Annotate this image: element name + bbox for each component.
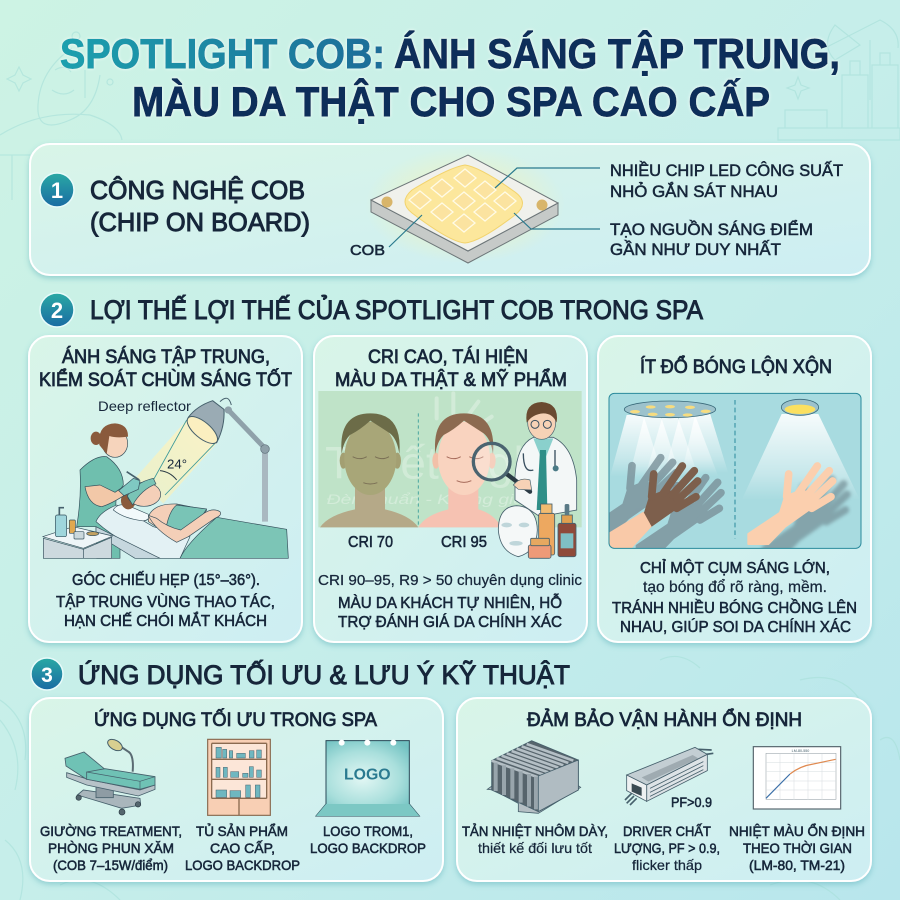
illustration: treatment under lamp (43, 398, 288, 558)
illustration: skin comparison: Tuyết Lights (325, 437, 575, 488)
captions: operation: THEO THỜI GIAN (743, 840, 852, 856)
panel: fewer shadows (592, 336, 871, 642)
icon: cob chip (365, 147, 600, 263)
captions: operation: thiết kế đối lưu tốt (478, 840, 592, 856)
panel: spa applications (30, 698, 443, 881)
captions: applications: LOGO BACKDROP (310, 840, 426, 856)
badge 1 (40, 173, 74, 207)
panel heading: ÁNH SÁNG TẬP TRUNG, (62, 346, 270, 368)
panel caption: CHỈ MỘT CỤM SÁNG LỚN, (640, 558, 830, 577)
captions: applications: LOGO BACKDROP (185, 857, 300, 873)
cob callouts: NHỎ GẮN SÁT NHAU (610, 182, 778, 201)
label: deep reflector: Deep reflector (98, 398, 191, 414)
panel: focused light (29, 336, 302, 642)
icon: heatsink (487, 741, 581, 813)
chart: lm-80 colour stability: LM-80-550 (792, 749, 809, 753)
illustration: shadow comparison (608, 392, 862, 549)
title: MÀU DA THẬT CHO SPA CAO CẤP (132, 77, 770, 125)
cob callouts: COB (350, 242, 385, 259)
icon: treatment bed (65, 737, 155, 815)
captions: operation: (LM-80, TM-21) (749, 857, 845, 873)
panel: cob technology (30, 144, 870, 275)
section 3 heading: 3 (41, 664, 53, 687)
panel caption: tạo bóng đổ rõ ràng, mềm. (643, 578, 827, 596)
cri labels (348, 534, 487, 551)
captions: applications: TỦ SẢN PHẨM (196, 822, 288, 839)
captions: applications: CAO CẤP, (210, 840, 275, 856)
title: SPOTLIGHT COB: (60, 30, 385, 77)
panel heading: CRI CAO, TÁI HIỆN (368, 346, 528, 368)
panel heading: ĐẢM BẢO VẬN HÀNH ỔN ĐỊNH (527, 709, 802, 731)
captions: applications (40, 822, 426, 873)
panel: stable operation (457, 698, 871, 881)
badge 1: 1 (51, 178, 63, 203)
panel caption: TRỢ ĐÁNH GIÁ DA CHÍNH XÁC (338, 612, 562, 631)
label: power factor: PF>0.9 (671, 794, 712, 810)
section 2 heading: LỢI THẾ LỢI THẾ CỦA SPOTLIGHT COB TRONG SPA (90, 293, 703, 325)
icon: logo backdrop (316, 740, 419, 816)
title: ÁNH SÁNG TẬP TRUNG, (394, 29, 840, 77)
cob callouts (350, 161, 843, 259)
captions: operation: NHIỆT MÀU ỔN ĐỊNH (729, 822, 865, 839)
panel caption: GÓC CHIẾU HẸP (15°–36°). (72, 570, 260, 589)
panel heading (335, 346, 567, 391)
cob callouts: NHIỀU CHIP LED CÔNG SUẤT (610, 161, 843, 180)
section 2 heading: 2 (51, 298, 63, 323)
captions: applications: GIƯỜNG TREATMENT, (40, 823, 182, 839)
cob heading (90, 175, 310, 237)
captions: applications: LOGO TROM1, (323, 823, 413, 839)
section 3 heading: ỨNG DỤNG TỐI ƯU & LƯU Ý KỸ THUẬT (78, 658, 570, 690)
cri labels: CRI 95 (441, 534, 487, 551)
cob callouts: GẦN NHƯ DUY NHẤT (610, 240, 781, 259)
panel heading (39, 346, 292, 391)
illustration: skin comparison (318, 391, 582, 558)
illustration: treatment under lamp: 24° (167, 458, 187, 472)
chart: lm-80 colour stability (753, 747, 841, 809)
panel heading: ỨNG DỤNG TỐI ƯU TRONG SPA (94, 709, 377, 731)
panel caption (612, 558, 857, 636)
captions: applications: (COB 7–15W/điểm) (53, 857, 168, 873)
title (60, 29, 840, 125)
panel caption (318, 572, 582, 631)
panel heading: MÀU DA THẬT & MỸ PHẨM (335, 369, 567, 391)
icon: driver (625, 747, 713, 805)
captions: operation (462, 822, 865, 873)
panel caption: TẬP TRUNG VÙNG THAO TÁC, (56, 592, 275, 611)
cob heading: CÔNG NGHỆ COB (90, 175, 305, 205)
panel caption: NHAU, GIÚP SOI DA CHÍNH XÁC (620, 617, 851, 636)
cob callouts: TẠO NGUỒN SÁNG ĐIỂM (610, 220, 813, 239)
icon: logo backdrop: LOGO (344, 766, 391, 783)
illustration: skin comparison: Đèn chuẩn - Không gian chất (327, 491, 578, 507)
captions: operation: flicker thấp (632, 857, 702, 873)
captions: applications: PHÒNG PHUN XĂM (48, 840, 174, 856)
cri labels: CRI 70 (348, 534, 393, 551)
captions: operation: DRIVER CHẤT (623, 823, 711, 839)
captions: operation: LƯỢNG, PF > 0.9, (614, 840, 720, 856)
panel caption: MÀU DA KHÁCH TỰ NHIÊN, HỖ (338, 593, 562, 612)
captions: operation: TẢN NHIỆT NHÔM DÀY, (462, 823, 608, 839)
cob heading: (CHIP ON BOARD) (90, 207, 310, 237)
panel caption (56, 570, 275, 630)
icon: product cabinet (208, 739, 270, 815)
panel: high cri (314, 336, 587, 642)
panel caption: TRÁNH NHIỀU BÓNG CHỒNG LÊN (612, 598, 857, 617)
panel heading: ÍT ĐỔ BÓNG LỘN XỘN (640, 356, 832, 378)
panel caption: HẠN CHẾ CHÓI MẮT KHÁCH (64, 611, 267, 630)
panel caption: CRI 90–95, R9 > 50 chuyên dụng clinic (318, 572, 582, 589)
panel heading: KIỂM SOÁT CHÙM SÁNG TỐT (39, 369, 292, 391)
